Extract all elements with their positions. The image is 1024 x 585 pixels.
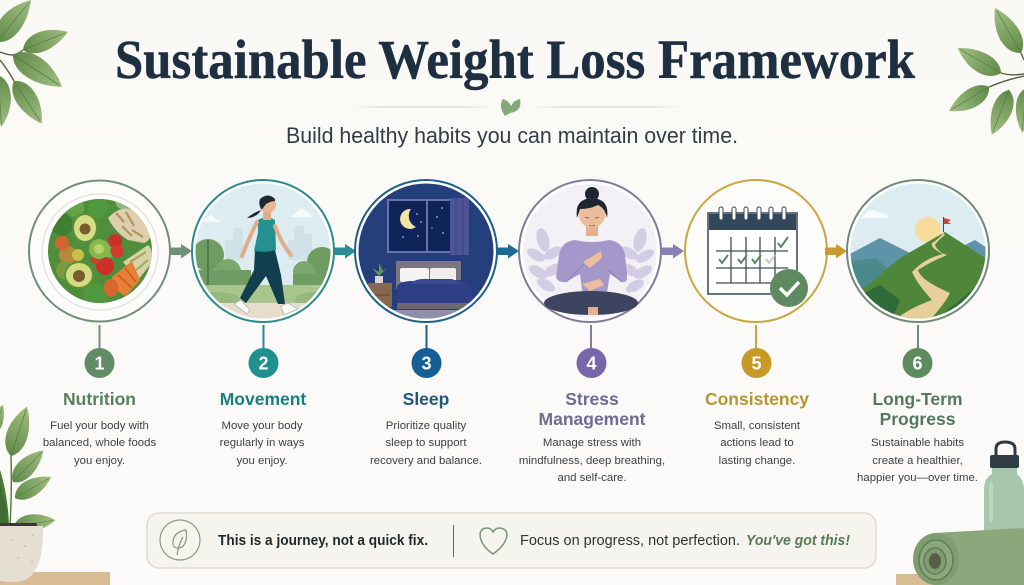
heading: stress management	[539, 389, 646, 429]
heading: long-term progress: Long-Term	[872, 389, 963, 409]
arrow 4	[662, 244, 684, 258]
description: nutrition: Fuel your body with	[50, 420, 149, 432]
heading: sleep: Sleep	[403, 389, 449, 409]
connector and number 6: 6	[912, 354, 923, 374]
leaves: top left	[0, 0, 71, 129]
step 2: movement	[190, 180, 340, 467]
connector and number 5: 5	[751, 354, 762, 374]
icon: leaf in circle	[160, 520, 200, 560]
description: nutrition	[43, 420, 156, 467]
description: nutrition: balanced, whole foods	[43, 437, 156, 449]
callout bar	[147, 513, 876, 568]
description: movement: regularly in ways	[220, 437, 305, 449]
step 3: sleep	[355, 180, 499, 467]
description: sleep	[370, 420, 482, 467]
description: long-term progress: create a healthier,	[872, 455, 963, 467]
description: sleep: sleep to support	[385, 437, 467, 449]
description: stress management	[519, 437, 665, 484]
connector and number 3: 3	[421, 354, 432, 374]
connector and number 3	[412, 325, 442, 378]
description: movement: Move your body	[221, 420, 303, 432]
step 4: stress management	[519, 180, 665, 484]
description: movement: you enjoy.	[236, 455, 288, 467]
arrow 2	[334, 244, 356, 258]
heading: long-term progress	[872, 389, 963, 429]
heading: consistency: Consistency	[705, 389, 809, 409]
arrow 3	[497, 244, 519, 258]
callout text: progress: Focus on progress, not perfection.	[520, 533, 740, 549]
icon: calendar with check	[685, 180, 827, 322]
connector and number 5	[742, 325, 772, 378]
subtitle: Build healthy habits you can maintain over time.	[286, 123, 738, 148]
connector and number 6	[902, 325, 932, 378]
description: consistency: Small, consistent	[714, 420, 801, 432]
step 5: consistency	[685, 180, 827, 467]
heading: nutrition: Nutrition	[63, 389, 136, 409]
yoga mat decoration	[896, 528, 1024, 585]
callout text: encouragement: You've got this!	[746, 533, 850, 549]
description: consistency: actions lead to	[720, 437, 794, 449]
icon: salad plate	[29, 180, 170, 322]
icon: mountain path	[846, 180, 990, 325]
description: stress management: and self-care.	[557, 472, 627, 484]
plant decoration: bottom left	[0, 403, 110, 585]
description: stress management: Manage stress with	[543, 437, 641, 449]
arrow 5	[825, 244, 847, 258]
description: long-term progress: Sustainable habits	[871, 437, 964, 449]
description: movement	[220, 420, 305, 467]
icon: heart	[480, 528, 507, 554]
description: consistency	[714, 420, 801, 467]
heading: stress management: Management	[539, 409, 646, 429]
heading: long-term progress: Progress	[880, 409, 956, 429]
leaves: top right	[945, 3, 1024, 139]
heading: stress management: Stress	[565, 389, 619, 409]
title: Sustainable Weight Loss Framework	[115, 29, 915, 90]
water bottle decoration	[984, 442, 1024, 532]
description: long-term progress	[857, 437, 978, 484]
description: sleep: recovery and balance.	[370, 455, 482, 467]
connector and number 4: 4	[586, 354, 597, 374]
heading: movement: Movement	[220, 389, 306, 409]
connector and number 2	[248, 325, 278, 378]
ornament divider	[352, 99, 682, 116]
description: stress management: mindfulness, deep breathing,	[519, 455, 665, 467]
connector and number 1: 1	[94, 354, 105, 374]
icon: walking woman	[190, 180, 340, 324]
description: consistency: lasting change.	[719, 455, 795, 467]
icon: bedroom at night	[355, 180, 499, 325]
connector and number 4	[576, 325, 606, 378]
callout text: journey: This is a journey, not a quick fix.	[218, 533, 428, 549]
arrow 1	[170, 244, 192, 258]
icon: meditating woman	[519, 180, 661, 322]
connector and number 2: 2	[258, 354, 269, 374]
step 1: nutrition	[29, 180, 170, 467]
description: nutrition: you enjoy.	[74, 455, 125, 467]
description: sleep: Prioritize quality	[386, 420, 466, 432]
connector and number 1	[84, 325, 114, 378]
step 6: long-term progress	[846, 180, 990, 484]
description: long-term progress: happier you—over time.	[857, 472, 978, 484]
